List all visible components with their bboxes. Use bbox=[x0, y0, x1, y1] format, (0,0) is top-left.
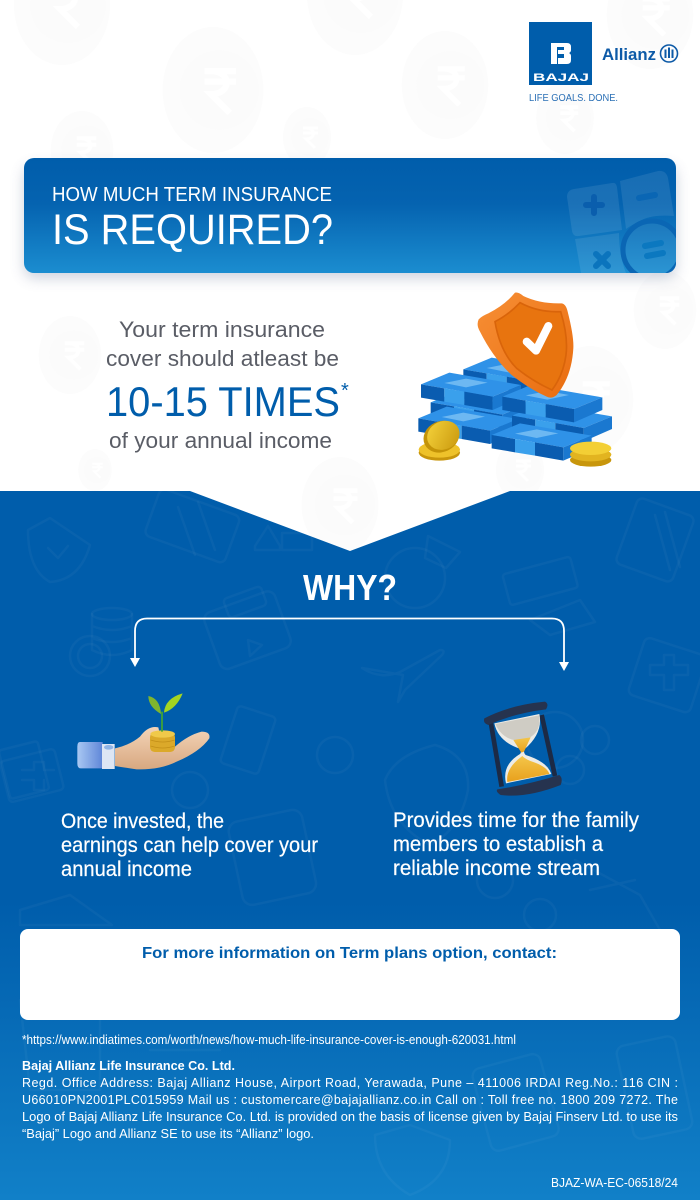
statement: 10-15 times annual income: 10-15 TIMES bbox=[106, 378, 340, 425]
icon: calculator watermark bbox=[567, 171, 681, 279]
logo: Bajaj Allianz bbox=[529, 22, 678, 104]
sprout bbox=[148, 693, 183, 732]
statement: 10-15 times annual income: of your annual income bbox=[109, 428, 332, 453]
illustration: shield over cash bundles and coins bbox=[418, 292, 612, 467]
statement: 10-15 times annual income: Your term insurance bbox=[119, 317, 325, 342]
company disclaimer: “Bajaj” Logo and Allianz SE to use its “Allianz” logo. bbox=[22, 1127, 314, 1141]
text: reason one: Once invested, the bbox=[61, 810, 224, 833]
arrow: bracket splitting to both reasons bbox=[130, 618, 569, 671]
cash bundles bbox=[418, 358, 612, 461]
contact panel: For more information on Term plans option, contact: bbox=[142, 945, 557, 962]
company disclaimer: Logo of Bajaj Allianz Life Insurance Co. Ltd. is provided on the basis of license given by Bajaj Finserv Ltd. to use its bbox=[22, 1110, 678, 1124]
background pattern: faint rupee coins bbox=[14, 0, 696, 553]
logo: Allianz wordmark: Allianz bbox=[602, 45, 656, 64]
company disclaimer: Bajaj Allianz Life Insurance Co. Ltd. bbox=[22, 1059, 235, 1073]
icon: orange shield with check bbox=[478, 292, 573, 398]
company disclaimer: U66010PN2001PLC015959 Mail us : customercare@bajajallianz.co.in Call on : Toll free no. 1800 209 7272. The bbox=[22, 1093, 678, 1107]
reference code: BJAZ-WA-EC-06518/24 bbox=[551, 1176, 678, 1190]
rear and front posts bbox=[491, 715, 555, 787]
hand bbox=[115, 727, 210, 769]
statement: 10-15 times annual income: cover should atleast be bbox=[106, 346, 339, 371]
title banner bbox=[24, 158, 681, 279]
logo: tagline: LIFE GOALS. DONE. bbox=[529, 93, 618, 104]
heading: WHY?: WHY? bbox=[303, 567, 397, 608]
glass bbox=[494, 714, 551, 783]
gold coins left bbox=[418, 415, 464, 461]
upper sand bbox=[495, 715, 539, 741]
shirt sleeve bbox=[77, 742, 115, 769]
logo: Bajaj square: BAJAJ bbox=[533, 72, 589, 84]
banner heading: HOW MUCH TERM INSURANCE bbox=[52, 184, 332, 206]
icon: hourglass bbox=[484, 702, 562, 796]
source footnote: *https://www.indiatimes.com/worth/news/how-much-life-insurance-cover-is-enough-620031.html bbox=[22, 1033, 516, 1047]
text: reason one: annual income bbox=[61, 858, 192, 881]
background pattern: faint finance icons bbox=[0, 488, 700, 1195]
banner heading: IS REQUIRED? bbox=[52, 206, 333, 254]
text: reason two bbox=[393, 809, 639, 880]
caps bbox=[484, 702, 562, 796]
company disclaimer: Regd. Office Address: Bajaj Allianz House, Airport Road, Yerawada, Pune – 411006 IRDAI Reg.No.: 116 CIN : bbox=[22, 1076, 678, 1090]
gold coins right bbox=[570, 442, 611, 467]
logo: Bajaj square bbox=[529, 22, 592, 85]
text: reason two: reliable income stream bbox=[393, 857, 600, 880]
banner heading bbox=[52, 184, 333, 254]
coin stack bbox=[150, 730, 175, 752]
text: reason one: earnings can help cover your bbox=[61, 834, 318, 857]
text: reason two: Provides time for the family bbox=[393, 809, 639, 832]
gold sand bbox=[507, 737, 549, 782]
icon: hand holding coins with sprout bbox=[77, 693, 210, 769]
contact panel bbox=[20, 929, 680, 1020]
company disclaimer bbox=[22, 1059, 678, 1141]
statement: 10-15 times annual income bbox=[106, 317, 349, 453]
text: reason one bbox=[61, 810, 318, 881]
statement: 10-15 times annual income: * bbox=[341, 380, 349, 402]
blue lower section with chevron notch bbox=[0, 491, 700, 1200]
text: reason two: members to establish a bbox=[393, 833, 603, 856]
